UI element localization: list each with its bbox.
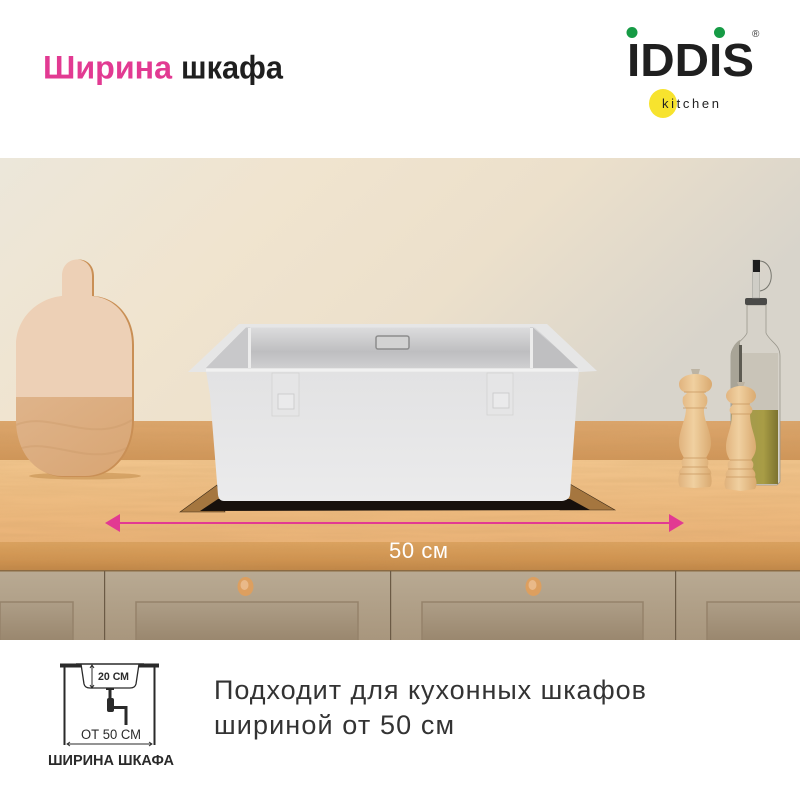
- sink cutout in countertop: [180, 484, 615, 512]
- countertop: [0, 460, 800, 543]
- cabinets: [0, 570, 800, 644]
- countertop front edge: [0, 542, 800, 571]
- backsplash: [0, 421, 800, 461]
- drain badge: [376, 336, 409, 349]
- cabinet walls and top: [64, 666, 154, 745]
- pepper mill: small: [724, 382, 756, 491]
- wood grain overlay: [0, 421, 800, 571]
- wall: [0, 158, 800, 422]
- logo: IDDIS kitchen: IDDIS: [627, 34, 754, 86]
- description text: Подходит для кухонных шкафов: [214, 675, 646, 705]
- description text: шириной от 50 см: [214, 710, 454, 740]
- sink body: [206, 371, 579, 501]
- title: Ширина: [43, 50, 172, 86]
- sink bowl interior: [250, 328, 574, 368]
- sink profile: [81, 664, 139, 688]
- width dimension: [67, 742, 152, 746]
- kitchen photo: [0, 158, 800, 644]
- title: [43, 50, 283, 86]
- depth label: 20 СМ: [98, 671, 129, 683]
- width arrow: [105, 514, 684, 532]
- sink rim: [188, 324, 597, 372]
- description text: [214, 675, 646, 740]
- logo: IDDIS kitchen: ®: [752, 29, 760, 40]
- logo: IDDIS kitchen: [626, 27, 760, 118]
- right bracket: [487, 373, 513, 415]
- siphon: [110, 689, 126, 725]
- oil bottle: [731, 260, 780, 485]
- cabinet width diagram: [48, 664, 175, 769]
- cutting board: [10, 255, 141, 482]
- depth arrow: [90, 665, 94, 688]
- cabinet knobs: [238, 577, 542, 596]
- caption: ШИРИНА ШКАФА: [48, 753, 175, 769]
- width label: 50 см: [389, 538, 448, 563]
- logo: IDDIS kitchen: kitchen: [662, 96, 719, 111]
- width label: ОТ 50 СМ: [81, 727, 141, 742]
- pepper mill: large: [678, 369, 712, 488]
- left bracket: [272, 373, 299, 416]
- sink: [188, 324, 597, 501]
- title: шкафа: [181, 50, 283, 86]
